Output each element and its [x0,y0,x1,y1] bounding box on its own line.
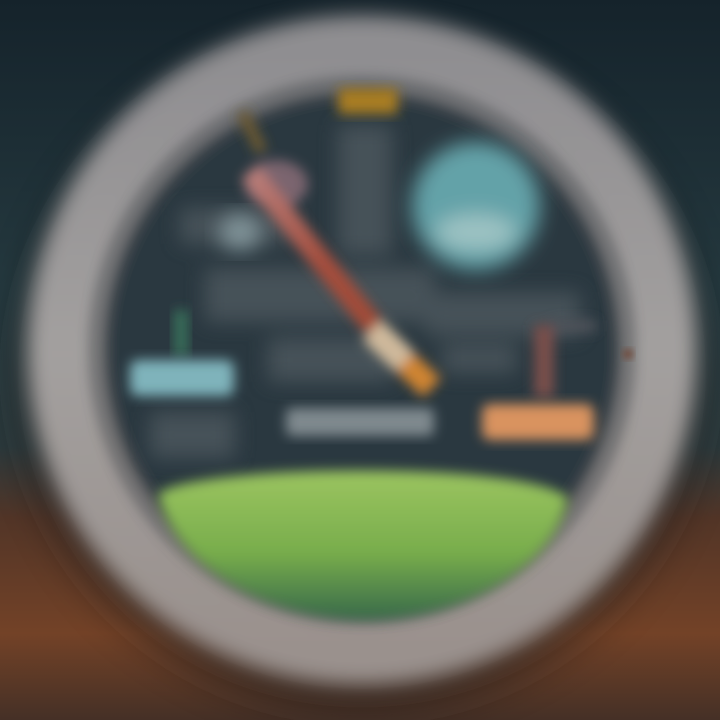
needle [242,112,432,388]
small tick [623,349,633,359]
green dome [158,470,568,620]
light blob left of needle [218,214,262,250]
orange bar [482,404,594,440]
teal circle [412,142,540,270]
gauge ring [62,50,662,650]
left stem [174,310,188,356]
gauge face markings [150,125,580,458]
ring inner shading [94,82,630,618]
right stem [534,320,596,397]
gold label [338,88,398,114]
centre label blur [286,408,434,436]
light blue bar [130,360,234,396]
